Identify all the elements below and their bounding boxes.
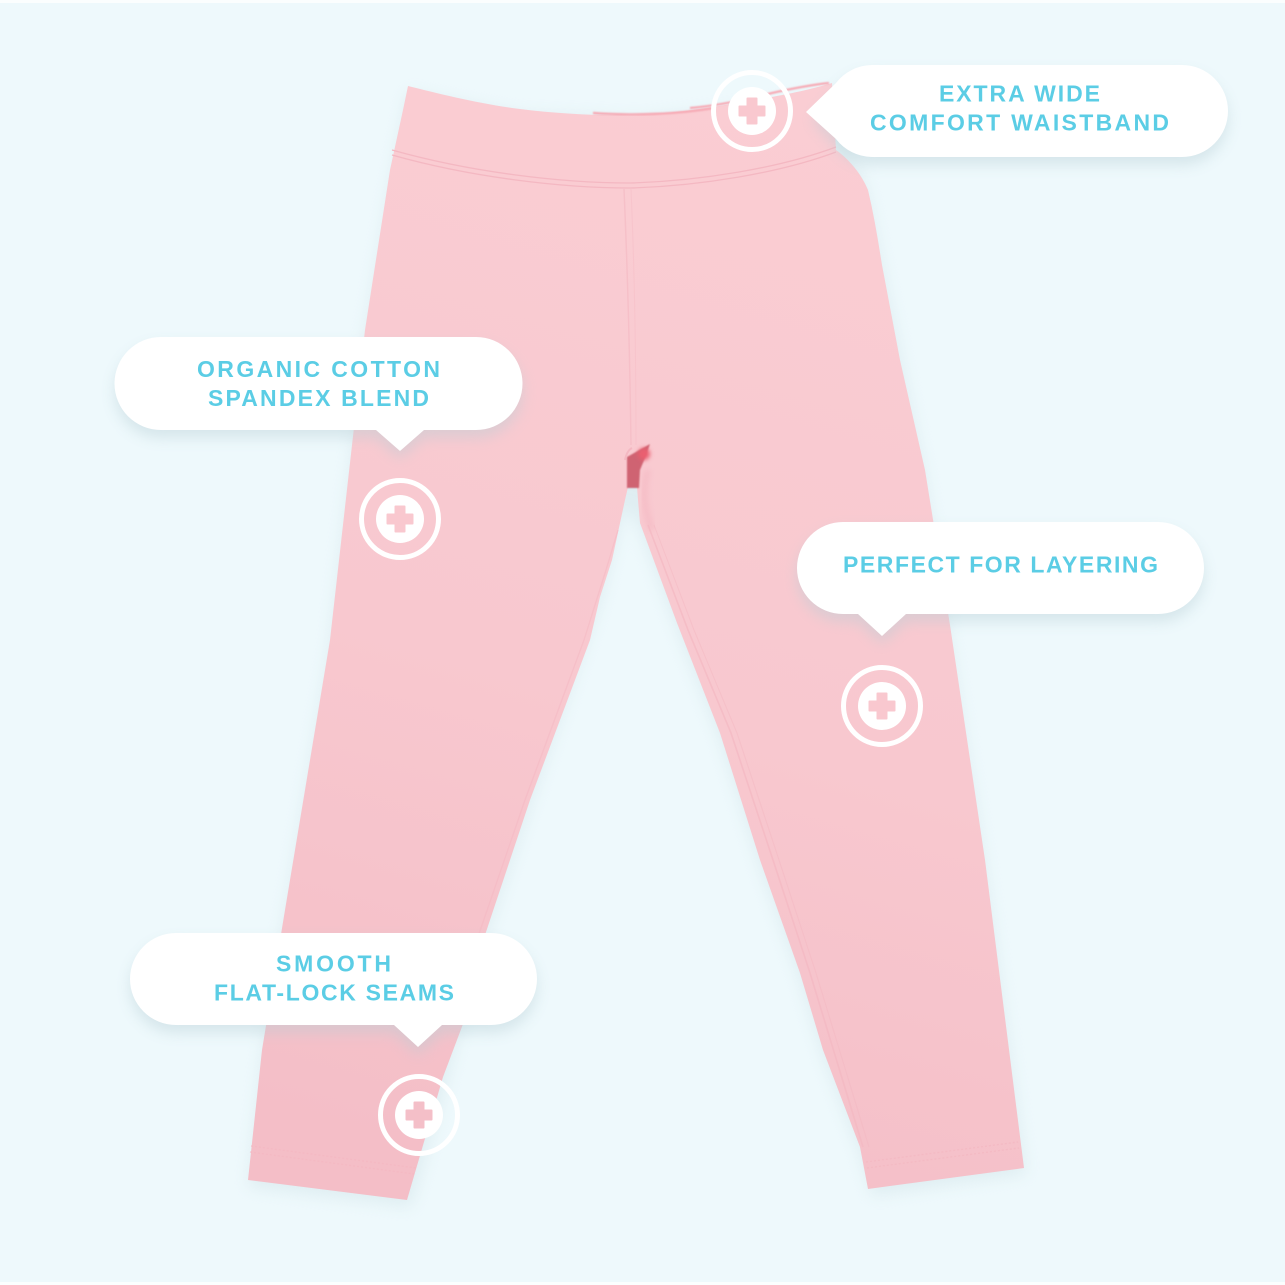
- callout: layering: [797, 522, 1204, 644]
- icon: plus marker seams: [380, 1076, 458, 1154]
- callout: layering: PERFECT FOR LAYERING: [843, 552, 1158, 578]
- seams: [250, 147, 1019, 1174]
- callout: seams: FLAT-LOCK SEAMS: [214, 980, 454, 1006]
- callout: waistband: [806, 65, 1228, 165]
- callout: fabric blend: [114, 337, 522, 459]
- callout: seams: SMOOTH: [276, 950, 391, 976]
- leggings body: [248, 83, 1024, 1200]
- callout: fabric blend: SPANDEX BLEND: [208, 385, 429, 411]
- back waistband edge: [593, 83, 829, 116]
- callout: waistband: EXTRA WIDE: [939, 80, 1100, 106]
- icon: plus marker layering: [844, 668, 920, 744]
- icon: plus marker fabric: [362, 480, 438, 558]
- callout: fabric blend: ORGANIC COTTON: [197, 356, 440, 382]
- leggings: [248, 83, 1026, 1207]
- callout: seams: [130, 933, 537, 1055]
- icon: plus marker waistband: [714, 72, 790, 150]
- callout: waistband: COMFORT WAISTBAND: [870, 110, 1169, 136]
- crotch shadow: [627, 444, 652, 530]
